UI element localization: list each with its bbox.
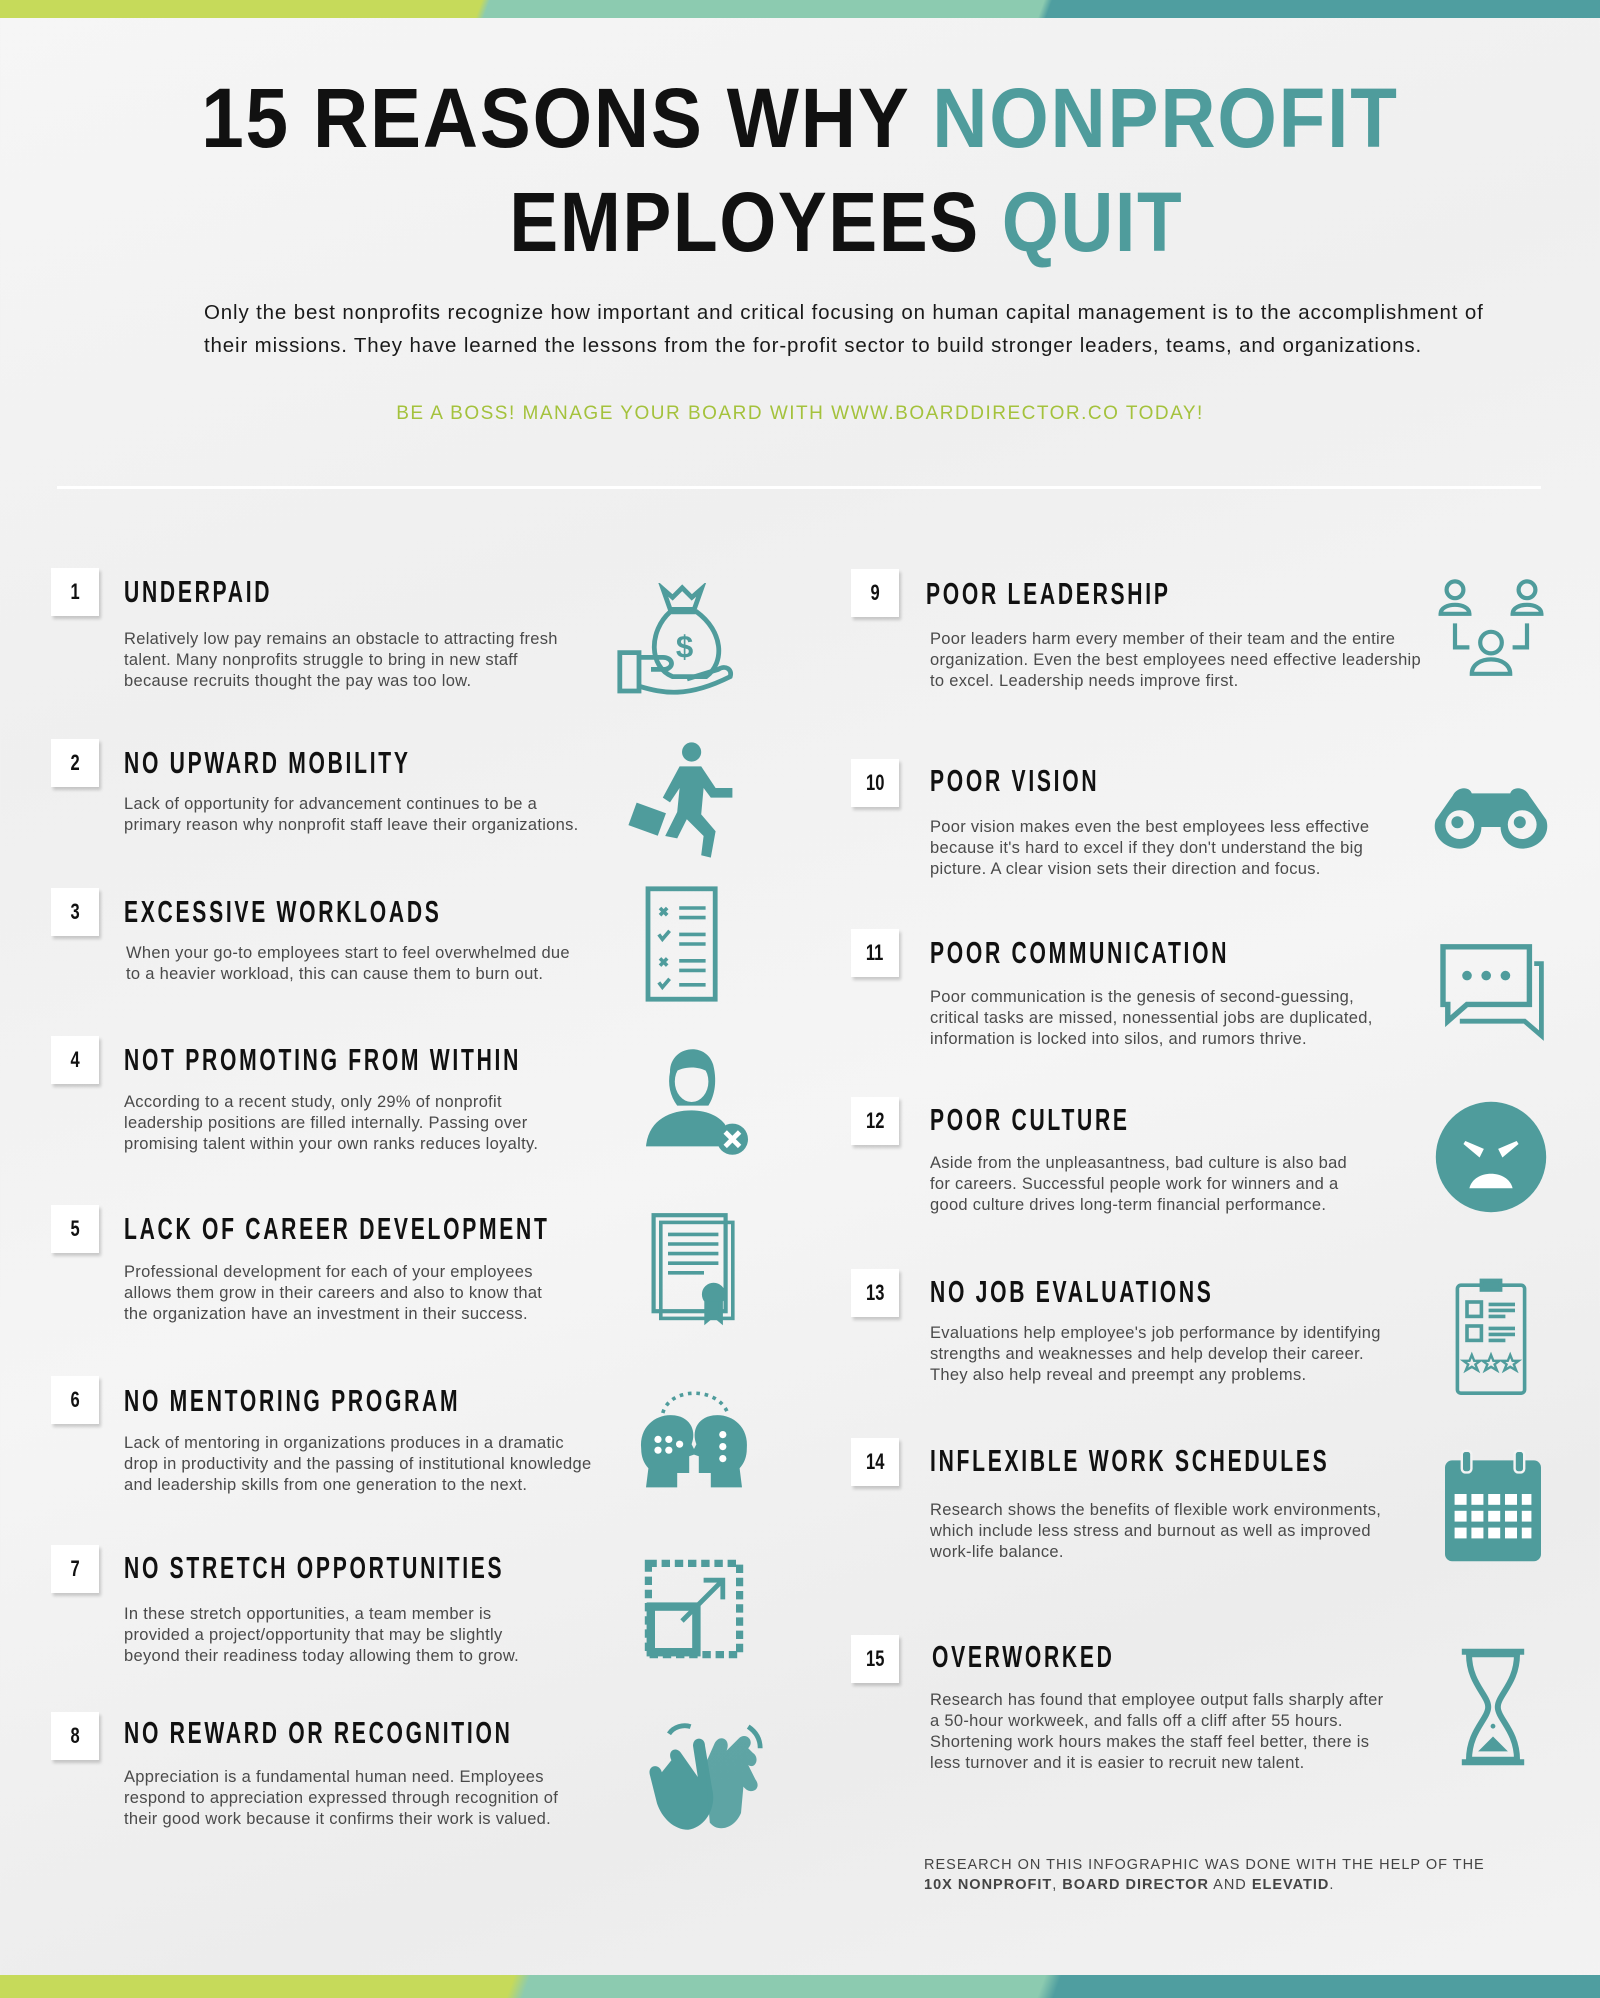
heading 6: NO MENTORING PROGRAM xyxy=(124,1383,460,1418)
icon: binoculars xyxy=(1434,788,1548,849)
text 5: the organization have an investment in their success. xyxy=(124,1305,528,1323)
heading 5: LACK OF CAREER DEVELOPMENT xyxy=(124,1211,550,1246)
number 3: 3 xyxy=(70,899,80,924)
number 8 xyxy=(51,1712,99,1760)
item 14 xyxy=(840,1434,1560,1564)
text 2 xyxy=(124,795,579,834)
icon: clapping hands xyxy=(650,1723,763,1830)
item 1 xyxy=(51,568,558,690)
icon: two heads exchanging knowledge xyxy=(640,1392,747,1488)
text 9: Poor leaders harm every member of their team and the entire xyxy=(930,630,1395,648)
icon: money bag in hand xyxy=(617,583,734,695)
text 13: Evaluations help employee's job performance by identifying xyxy=(930,1324,1381,1342)
number 3 xyxy=(51,888,99,936)
heading 4: NOT PROMOTING FROM WITHIN xyxy=(124,1042,521,1077)
intro paragraph: their missions. They have learned the lessons from the for-profit sector to build stronger leaders, teams, and organizations. xyxy=(204,334,1422,357)
text 11: information is locked into silos, and rumors thrive. xyxy=(930,1030,1307,1048)
text 9: organization. Even the best employees need effective leadership xyxy=(930,651,1421,669)
item 5 xyxy=(51,1205,550,1323)
icon: stretch box xyxy=(644,1560,744,1658)
number 9: 9 xyxy=(870,580,880,605)
text 4: promising talent within your own ranks reduces loyalty. xyxy=(124,1135,538,1153)
text 1 xyxy=(124,630,558,690)
title line 2: EMPLOYEES QUIT xyxy=(509,175,1183,269)
heading 11: POOR COMMUNICATION xyxy=(930,935,1229,970)
text 4: According to a recent study, only 29% of nonprofit xyxy=(124,1093,502,1111)
text 1: because recruits thought the pay was too low. xyxy=(124,672,471,690)
text 14: Research shows the benefits of flexible work environments, xyxy=(930,1501,1381,1519)
text 1: Relatively low pay remains an obstacle to attracting fresh xyxy=(124,630,558,648)
number 10 xyxy=(851,759,899,807)
icon: team leadership xyxy=(1438,579,1544,676)
number 5 xyxy=(51,1205,99,1253)
text 3: When your go-to employees start to feel overwhelmed due xyxy=(126,944,570,962)
number 11 xyxy=(851,929,899,977)
number 6: 6 xyxy=(70,1387,80,1412)
text 13: strengths and weaknesses and help develop their career. xyxy=(930,1345,1364,1363)
number 15: 15 xyxy=(866,1646,884,1671)
number 11: 11 xyxy=(866,940,884,965)
text 5: Professional development for each of your employees xyxy=(124,1263,533,1281)
heading 12: POOR CULTURE xyxy=(930,1102,1130,1137)
number 5: 5 xyxy=(70,1216,80,1241)
footer credits: 10X NONPROFIT, BOARD DIRECTOR AND ELEVATID. xyxy=(924,1877,1334,1893)
text 6: drop in productivity and the passing of institutional knowledge xyxy=(124,1455,591,1473)
text 13: They also help reveal and preempt any problems. xyxy=(930,1366,1306,1384)
text 9: to excel. Leadership needs improve first. xyxy=(930,672,1239,690)
text 15: Research has found that employee output falls sharply after xyxy=(930,1691,1383,1709)
number 12 xyxy=(851,1097,899,1145)
text 2: primary reason why nonprofit staff leave their organizations. xyxy=(124,816,579,834)
text 10: because it's hard to excel if they don't understand the big xyxy=(930,839,1363,857)
heading 10: POOR VISION xyxy=(930,763,1099,798)
text 8 xyxy=(124,1768,558,1828)
item 10 xyxy=(851,759,1369,878)
text 1: talent. Many nonprofits struggle to bring in new staff xyxy=(124,651,518,669)
bottom color band xyxy=(0,1975,1600,1998)
text 7: beyond their readiness today allowing them to grow. xyxy=(124,1647,519,1665)
heading 7: NO STRETCH OPPORTUNITIES xyxy=(124,1550,504,1585)
icon: checklist xyxy=(646,886,718,1002)
text 14: which include less stress and burnout as well as improved xyxy=(930,1522,1371,1540)
number 7 xyxy=(51,1545,99,1593)
heading 8: NO REWARD OR RECOGNITION xyxy=(124,1715,513,1750)
heading 9: POOR LEADERSHIP xyxy=(926,576,1171,611)
text 12: Aside from the unpleasantness, bad culture is also bad xyxy=(930,1154,1347,1172)
heading 3: EXCESSIVE WORKLOADS xyxy=(124,894,442,929)
heading 14: INFLEXIBLE WORK SCHEDULES xyxy=(930,1443,1329,1478)
text 6 xyxy=(124,1434,591,1494)
intro paragraph: Only the best nonprofits recognize how important and critical focusing on human capital management is to the accomplishment of xyxy=(204,301,1484,324)
item 11 xyxy=(851,929,1373,1048)
heading 1: UNDERPAID xyxy=(124,574,272,609)
heading 2: NO UPWARD MOBILITY xyxy=(124,745,411,780)
text 3 xyxy=(126,944,570,983)
item 6 xyxy=(51,1376,591,1494)
icon: woman with x xyxy=(646,1049,748,1155)
item 4 xyxy=(51,1036,538,1153)
text 11: critical tasks are missed, nonessential jobs are duplicated, xyxy=(930,1009,1373,1027)
icon: calendar xyxy=(1433,1446,1553,1566)
text 5 xyxy=(124,1263,542,1323)
item 2 xyxy=(51,739,579,834)
item 13 xyxy=(851,1269,1381,1384)
item 15 xyxy=(840,1630,1560,1760)
item 7 xyxy=(51,1545,519,1665)
text 14 xyxy=(930,1500,1381,1563)
text 6: and leadership skills from one generation to the next. xyxy=(124,1476,527,1494)
text 10 xyxy=(930,818,1369,878)
number 8: 8 xyxy=(70,1723,80,1748)
number 6 xyxy=(51,1376,99,1424)
item 12 xyxy=(851,1097,1347,1214)
text 8: respond to appreciation expressed through recognition of xyxy=(124,1789,558,1807)
number 14 xyxy=(851,1438,899,1486)
number 2 xyxy=(51,739,99,787)
text 12: for careers. Successful people work for winners and a xyxy=(930,1175,1338,1193)
text 7 xyxy=(124,1605,519,1665)
text 13 xyxy=(930,1323,1381,1386)
item 9 xyxy=(851,569,1421,690)
text 6: Lack of mentoring in organizations produces in a dramatic xyxy=(124,1434,564,1452)
number 10: 10 xyxy=(866,770,884,795)
text 15: Shortening work hours makes the staff feel better, there is xyxy=(930,1733,1369,1751)
top color band xyxy=(0,0,1600,18)
footer credits: RESEARCH ON THIS INFOGRAPHIC WAS DONE WITH THE HELP OF THE xyxy=(924,1857,1485,1873)
number 13: 13 xyxy=(866,1280,884,1305)
text 5: allows them grow in their careers and also to know that xyxy=(124,1284,542,1302)
number 2: 2 xyxy=(70,750,80,775)
text 7: provided a project/opportunity that may be slightly xyxy=(124,1626,503,1644)
text 14: work-life balance. xyxy=(930,1543,1064,1561)
icon: angry face xyxy=(1436,1102,1546,1212)
icon: evaluation clipboard xyxy=(1431,1278,1551,1398)
text 11 xyxy=(930,988,1373,1048)
number 14: 14 xyxy=(866,1449,884,1474)
text 9 xyxy=(930,630,1421,690)
number 13 xyxy=(851,1269,899,1317)
title line 1: 15 REASONS WHY NONPROFIT xyxy=(201,71,1399,165)
text 3: to a heavier workload, this can cause them to burn out. xyxy=(126,965,543,983)
text 4: leadership positions are filled internally. Passing over xyxy=(124,1114,528,1132)
text 10: Poor vision makes even the best employees less effective xyxy=(930,818,1369,836)
number 4 xyxy=(51,1036,99,1084)
text 12: good culture drives long-term financial performance. xyxy=(930,1196,1326,1214)
number 9 xyxy=(851,569,899,617)
text 7: In these stretch opportunities, a team member is xyxy=(124,1605,491,1623)
intro paragraph xyxy=(204,301,1484,357)
item 3 xyxy=(51,888,570,983)
footer credits xyxy=(924,1855,1485,1895)
text 8: Appreciation is a fundamental human need. Employees xyxy=(124,1768,544,1786)
heading 13: NO JOB EVALUATIONS xyxy=(930,1274,1214,1309)
text 10: picture. A clear vision sets their direction and focus. xyxy=(930,860,1321,878)
text 15: less turnover and it is easier to recruit new talent. xyxy=(930,1754,1304,1772)
item 8 xyxy=(51,1712,558,1828)
icon: running businessman xyxy=(628,742,732,858)
icon: hourglass xyxy=(1433,1647,1553,1767)
heading 15: OVERWORKED xyxy=(932,1639,1115,1674)
text 4 xyxy=(124,1093,538,1153)
text 12 xyxy=(930,1154,1347,1214)
number 15 xyxy=(851,1635,899,1683)
text 8: their good work because it confirms their work is valued. xyxy=(124,1810,551,1828)
icon: certificate xyxy=(652,1213,735,1326)
icon: money bag in hand: $ xyxy=(676,629,693,664)
call to action: BE A BOSS! MANAGE YOUR BOARD WITH WWW.BOARDDIRECTOR.CO TODAY! xyxy=(396,403,1204,424)
number 1: 1 xyxy=(70,579,80,604)
number 12: 12 xyxy=(866,1108,884,1133)
text 15 xyxy=(930,1690,1383,1774)
text 15: a 50-hour workweek, and falls off a cliff after 55 hours. xyxy=(930,1712,1343,1730)
number 4: 4 xyxy=(70,1047,80,1072)
icon: speech bubbles xyxy=(1440,944,1544,1041)
number 7: 7 xyxy=(70,1556,80,1581)
text 11: Poor communication is the genesis of second-guessing, xyxy=(930,988,1354,1006)
number 1 xyxy=(51,568,99,616)
text 2: Lack of opportunity for advancement continues to be a xyxy=(124,795,537,813)
